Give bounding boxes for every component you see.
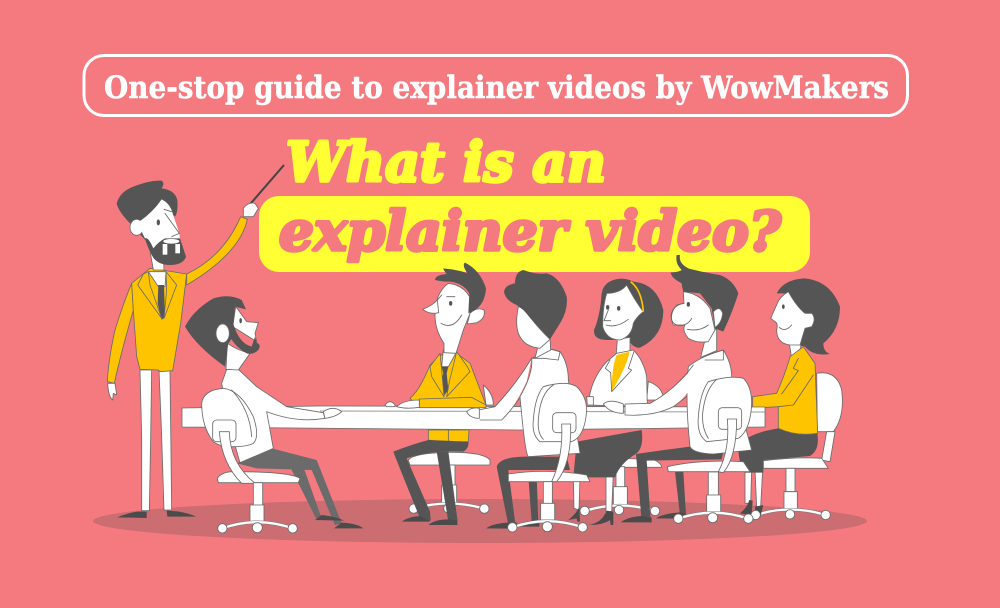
woman in yellow blazer: body and head — [738, 278, 840, 518]
seated bearded man: torso and arm — [222, 369, 342, 463]
woman's sleeve on table — [587, 397, 593, 405]
conference table — [182, 406, 765, 430]
man with big nose: torso and arm — [603, 350, 752, 454]
man in yellow suit: body and head — [393, 263, 486, 525]
hands and arms resting on the table — [385, 397, 593, 408]
presenter: shirt, tie and lapels — [138, 272, 177, 320]
seated bearded man: office chair — [202, 388, 300, 533]
woman in yellow blazer: chair — [756, 373, 842, 515]
man in yellow suit: chair — [408, 385, 493, 513]
presenter: suit and arms — [107, 203, 258, 400]
seated bearded man: legs — [237, 448, 363, 528]
woman with headband: body and head — [568, 279, 663, 525]
man in white shirt, back view: torso and arm — [467, 349, 580, 457]
man with big nose: office chair — [667, 377, 753, 523]
presenter: pointer stick — [243, 165, 284, 212]
man in white shirt, back view: head — [504, 270, 567, 358]
main title line two on highlight: explainer video? — [279, 199, 782, 263]
man with big nose: head — [671, 255, 738, 357]
woman with headband: chair — [580, 382, 663, 516]
presenter: legs and shoes — [117, 370, 196, 518]
heading badge — [84, 56, 908, 116]
floor shadow — [93, 499, 867, 543]
near side team members — [467, 255, 753, 532]
yellow suit arm and hand — [385, 397, 486, 408]
heading badge: One-stop guide to explainer videos by WowMakers — [104, 70, 889, 106]
main title line one: What is an — [286, 130, 606, 194]
man with big nose: legs — [621, 447, 723, 522]
base wheels of the far right chair — [751, 510, 830, 520]
far side team members — [393, 263, 842, 525]
presenter: head — [117, 181, 186, 270]
seated bearded man and presenter — [107, 165, 363, 533]
man in white shirt, back view: office chair — [508, 383, 590, 532]
man in white shirt, back view: legs — [486, 457, 570, 529]
seated bearded man: head — [185, 296, 260, 370]
